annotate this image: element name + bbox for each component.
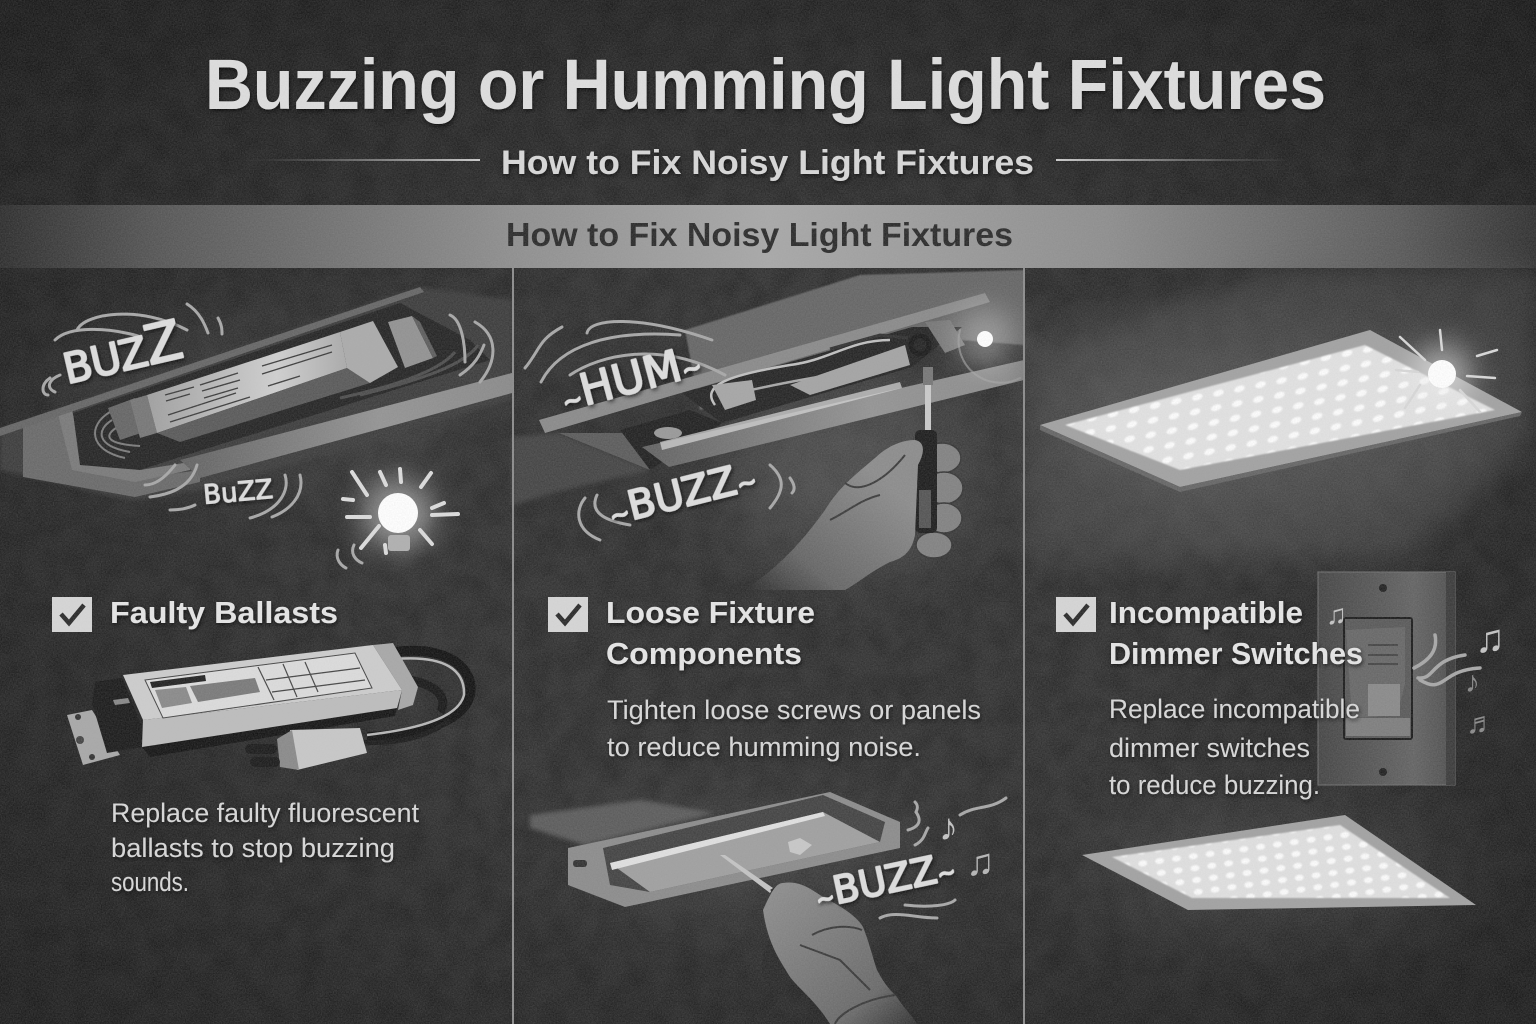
illustration: open ceiling fixture with ballast	[0, 287, 512, 500]
icon: gloved hand with tool	[762, 882, 917, 1024]
panel: loose fixture components	[512, 270, 1024, 1024]
heading: loose fixture components	[606, 595, 815, 671]
description: incompatible dimmer switches: to reduce buzzing.	[1109, 770, 1320, 800]
section banner: How to Fix Noisy Light Fixtures	[506, 216, 1013, 253]
sound waves, BUZZ label and music notes: ♪	[939, 807, 958, 849]
icon: glowing bulb	[343, 469, 458, 553]
music notes and sound waves	[1326, 599, 1505, 740]
wires at left end of fixture	[95, 412, 140, 458]
heading: faulty ballasts: Faulty Ballasts	[110, 595, 338, 630]
sound waves and BUZZ labels	[43, 304, 493, 568]
description: loose fixture components	[607, 695, 981, 762]
icon: flickering bulb	[1396, 330, 1497, 412]
checkbox: incompatible dimmer switches	[1056, 597, 1096, 632]
music notes and sound waves: ♪	[1465, 666, 1480, 699]
icon: gloved hand with screwdriver	[745, 367, 963, 590]
heading: incompatible dimmer switches	[1109, 595, 1363, 671]
description: faulty ballasts: Replace faulty fluorescent	[111, 798, 419, 828]
description: incompatible dimmer switches	[1109, 694, 1360, 800]
heading: loose fixture components: Components	[606, 636, 802, 671]
sound waves, BUZZ label and music notes: ~BUZZ~	[811, 844, 959, 917]
section banner	[0, 205, 1536, 268]
checkbox: faulty ballasts	[52, 597, 92, 632]
description: faulty ballasts: ballasts to stop buzzing	[111, 833, 395, 863]
ballast label lines	[165, 345, 332, 422]
panel: faulty ballasts	[0, 287, 512, 897]
checkbox: loose fixture components	[548, 597, 588, 632]
music notes and sound waves: ♬	[1466, 707, 1496, 740]
description: incompatible dimmer switches: Replace incompatible	[1109, 694, 1360, 724]
sound waves and HUM / BUZZ labels: ~BUZZ~	[603, 454, 761, 535]
description: faulty ballasts: sounds.	[111, 867, 189, 897]
description: loose fixture components: Tighten loose screws or panels	[607, 695, 981, 725]
illustration: ballast unit	[67, 643, 471, 770]
illustration: dimmer switch wall plate	[1318, 572, 1455, 785]
subtitle with flanking lines: How to Fix Noisy Light Fixtures	[501, 144, 1034, 182]
sound waves and HUM / BUZZ labels	[525, 321, 794, 540]
heading: incompatible dimmer switches: Incompatible	[1109, 595, 1303, 630]
music notes and sound waves: ♫	[1475, 617, 1505, 661]
sound waves and BUZZ labels: BuZZ	[202, 474, 274, 511]
title: Buzzing or Humming Light Fixtures	[205, 46, 1326, 125]
heading: loose fixture components: Loose Fixture	[606, 595, 815, 630]
heading: incompatible dimmer switches: Dimmer Switches	[1109, 636, 1363, 671]
sound waves, BUZZ label and music notes	[811, 798, 1006, 918]
music notes and sound waves: ♫	[1326, 599, 1347, 630]
illustration: fixture being tightened	[512, 270, 1024, 505]
wires and electrical parts	[711, 335, 908, 405]
panel: incompatible dimmer switches	[1024, 268, 1536, 910]
sound waves, BUZZ label and music notes: ♫	[966, 842, 994, 884]
sound waves and HUM / BUZZ labels: ~HUM~	[555, 335, 706, 422]
illustration: upper LED panel	[1040, 330, 1522, 492]
illustration: ceiling beam shading	[1024, 268, 1536, 560]
illustration: lower LED panel	[1082, 815, 1476, 910]
description: loose fixture components: to reduce humming noise.	[607, 732, 921, 762]
illustration: fixture tray	[530, 792, 900, 922]
sound waves and BUZZ labels: BUZZ	[56, 308, 187, 397]
description: faulty ballasts	[111, 798, 419, 897]
description: incompatible dimmer switches: dimmer switches	[1109, 733, 1310, 763]
column dividers	[512, 268, 1025, 1024]
